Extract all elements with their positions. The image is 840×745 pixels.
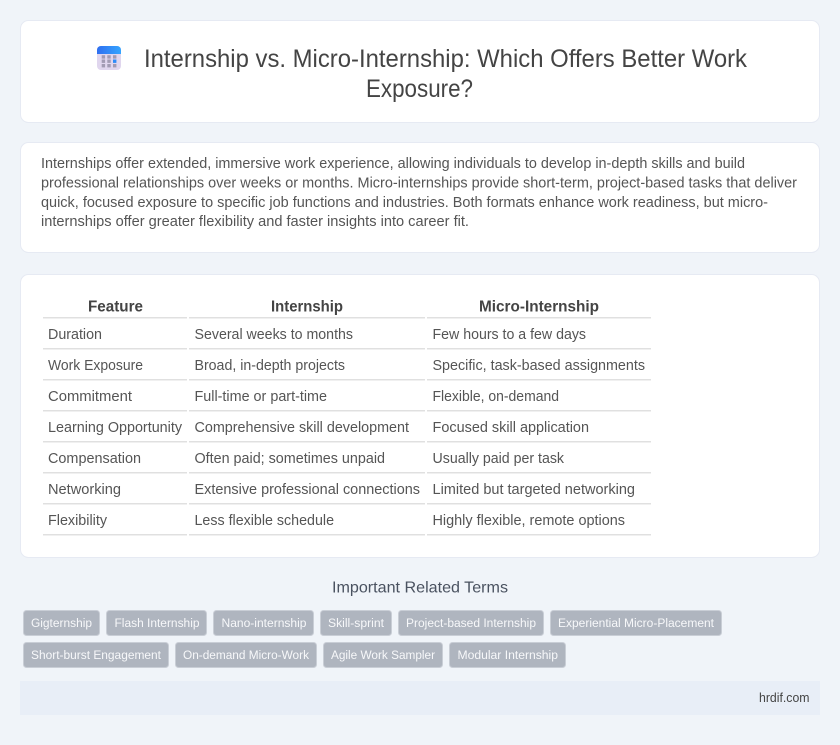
tag: Agile Work Sampler <box>324 642 442 668</box>
tag: Skill-sprint: Skill-sprint <box>328 616 385 630</box>
intro paragraph: internships offer greater flexibility and faster insights into career fit. <box>41 214 469 230</box>
intro paragraph <box>41 156 797 230</box>
title: Exposure? <box>366 75 473 103</box>
row: compensation <box>48 451 565 467</box>
tag: Nano-internship: Nano-internship <box>222 616 307 630</box>
tag: Modular Internship <box>450 642 566 668</box>
tag: Flash Internship: Flash Internship <box>114 616 200 630</box>
row: networking: Networking <box>48 482 121 498</box>
tag: Modular Internship: Modular Internship <box>458 648 558 662</box>
row: commitment: Commitment <box>48 389 132 405</box>
row: learning opportunity: Learning Opportunity <box>48 420 183 436</box>
row: commitment: Full-time or part-time <box>194 389 327 405</box>
intro paragraph: Internships offer extended, immersive work experience, allowing individuals to develop in-depth skills and build <box>41 156 745 172</box>
row: commitment: Flexible, on-demand <box>432 389 559 405</box>
row: compensation: Usually paid per task <box>432 451 565 467</box>
row: networking: Limited but targeted networking <box>432 482 635 498</box>
row: networking: Extensive professional connections <box>194 482 420 498</box>
footer credit: hrdif.com <box>759 691 810 705</box>
tag: Skill-sprint <box>320 610 392 636</box>
row: work exposure: Specific, task-based assignments <box>432 358 645 374</box>
panel: comparison table <box>20 274 820 558</box>
row: compensation: Often paid; sometimes unpaid <box>194 451 385 467</box>
intro paragraph: professional relationships over weeks or months. Micro-internships provide short-term, project-based tasks that deliver <box>41 176 797 192</box>
row: compensation: Compensation <box>48 451 141 467</box>
row: learning opportunity: Comprehensive skill development <box>194 420 409 436</box>
row: flexibility: Flexibility <box>48 513 108 529</box>
table header: Feature <box>88 298 143 316</box>
tag: Experiential Micro-Placement <box>550 610 722 636</box>
row: work exposure <box>48 358 645 374</box>
table header: Internship <box>271 298 343 316</box>
tag: On-demand Micro-Work: On-demand Micro-Work <box>183 648 310 662</box>
tag: Project-based Internship: Project-based Internship <box>406 616 536 630</box>
tag: Short-burst Engagement <box>24 642 168 668</box>
intro paragraph: quick, focused exposure to specific job functions and industries. Both formats enhance work readiness, but micro- <box>41 195 768 211</box>
tag: On-demand Micro-Work <box>176 642 316 668</box>
panel: introduction <box>20 142 820 252</box>
tag: Gigternship <box>24 610 100 636</box>
row: flexibility: Highly flexible, remote options <box>432 513 625 529</box>
tag: Agile Work Sampler: Agile Work Sampler <box>331 648 435 662</box>
row: duration: Several weeks to months <box>194 327 353 343</box>
heading: related terms: Important Related Terms <box>332 580 508 596</box>
title: Internship vs. Micro-Internship: Which Offers Better Work <box>144 45 747 73</box>
row: learning opportunity: Focused skill application <box>432 420 589 436</box>
tag: Short-burst Engagement: Short-burst Engagement <box>31 648 162 662</box>
row: networking <box>48 482 635 498</box>
row: flexibility: Less flexible schedule <box>194 513 334 529</box>
footer <box>20 681 820 715</box>
tag: Gigternship: Gigternship <box>31 616 92 630</box>
row: commitment <box>48 389 559 405</box>
row: learning opportunity <box>48 420 589 436</box>
row: duration: Few hours to a few days <box>432 327 586 343</box>
table header: Micro-Internship <box>479 298 599 316</box>
panel: title card <box>20 20 820 122</box>
title <box>144 45 747 103</box>
tag: Project-based Internship <box>398 610 544 636</box>
row: work exposure: Broad, in-depth projects <box>194 358 345 374</box>
row: duration <box>48 327 586 343</box>
row: flexibility <box>48 513 625 529</box>
tag: Nano-internship <box>214 610 314 636</box>
row: work exposure: Work Exposure <box>48 358 143 374</box>
icon: calendar <box>97 46 121 70</box>
row: duration: Duration <box>48 327 102 343</box>
table header <box>88 298 599 316</box>
tag: Flash Internship <box>106 610 206 636</box>
related term tags <box>24 610 722 668</box>
tag: Experiential Micro-Placement: Experiential Micro-Placement <box>558 616 715 630</box>
